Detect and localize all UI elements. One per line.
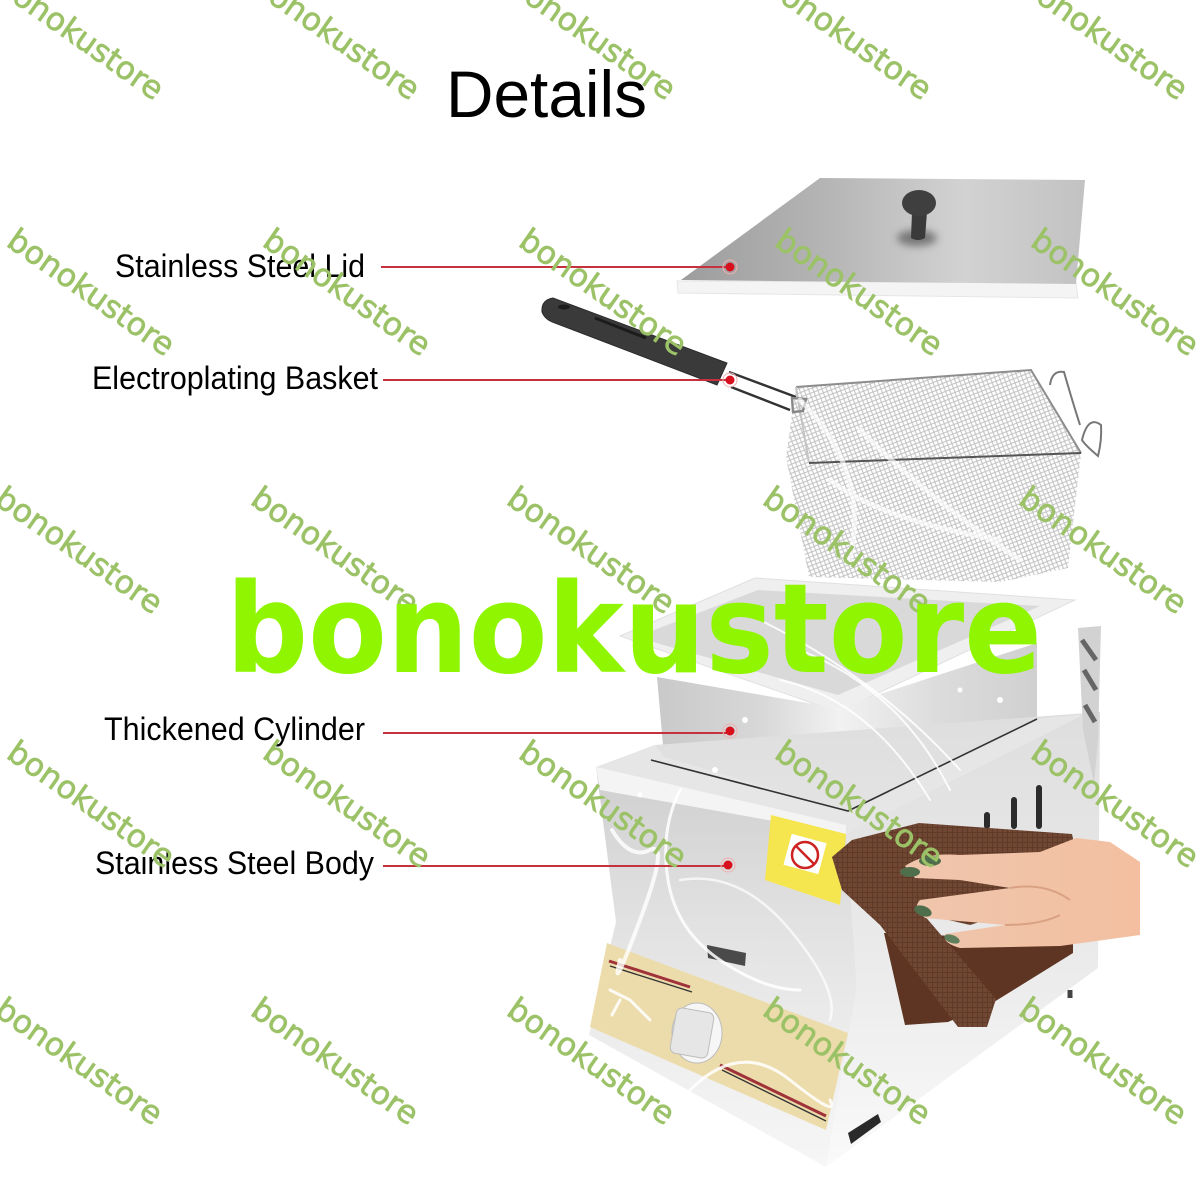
side vents bbox=[987, 788, 1039, 826]
callout: stainless steel body bbox=[95, 845, 735, 881]
small watermarks: bonokustore bbox=[1024, 734, 1200, 876]
callout: electroplating basket: Electroplating Basket bbox=[92, 360, 378, 396]
warning sticker bbox=[765, 815, 846, 905]
small watermarks: bonokustore bbox=[500, 480, 681, 622]
small watermarks: bonokustore bbox=[512, 734, 693, 876]
side bracket bbox=[1078, 626, 1101, 784]
small watermarks: bonokustore bbox=[1024, 222, 1200, 364]
callout: electroplating basket bbox=[92, 360, 737, 396]
small watermarks: bonokustore bbox=[0, 734, 181, 876]
callout: stainless steel lid bbox=[115, 248, 737, 284]
small watermarks: bonokustore bbox=[1012, 480, 1193, 622]
title: Details bbox=[446, 57, 647, 131]
water splash bbox=[610, 400, 1020, 1107]
fryer body illustration bbox=[589, 626, 1101, 1167]
towel and hand bbox=[832, 823, 1140, 1027]
logo badge bbox=[707, 945, 746, 966]
small watermarks: bonokustore bbox=[256, 734, 437, 876]
small watermarks: bonokustore bbox=[756, 991, 937, 1133]
small watermarks: bonokustore bbox=[768, 222, 949, 364]
basket illustration bbox=[542, 298, 1101, 582]
callout: stainless steel body: Stainless Steel Body bbox=[95, 845, 374, 881]
small watermarks: bonokustore bbox=[0, 222, 181, 364]
small watermarks: bonokustore bbox=[244, 480, 425, 622]
power switch bbox=[848, 1114, 881, 1144]
small watermarks: bonokustore bbox=[1012, 991, 1193, 1133]
small watermarks: bonokustore bbox=[756, 480, 937, 622]
small watermarks: bonokustore bbox=[244, 991, 425, 1133]
beige panel bbox=[590, 943, 848, 1130]
callout: thickened cylinder bbox=[104, 711, 737, 747]
callout: thickened cylinder: Thickened Cylinder bbox=[104, 711, 365, 747]
small watermarks: bonokustore bbox=[256, 222, 437, 364]
small watermarks: bonokustore bbox=[768, 734, 949, 876]
small watermarks: bonokustore bbox=[512, 222, 693, 364]
callout: stainless steel lid: Stainless Steel Lid bbox=[115, 248, 365, 284]
lid illustration bbox=[677, 178, 1085, 298]
small watermarks: bonokustore bbox=[500, 991, 681, 1133]
fryer pot illustration bbox=[620, 578, 1075, 811]
large watermark: bonokustore bbox=[226, 558, 1042, 702]
control dial bbox=[672, 1003, 722, 1063]
